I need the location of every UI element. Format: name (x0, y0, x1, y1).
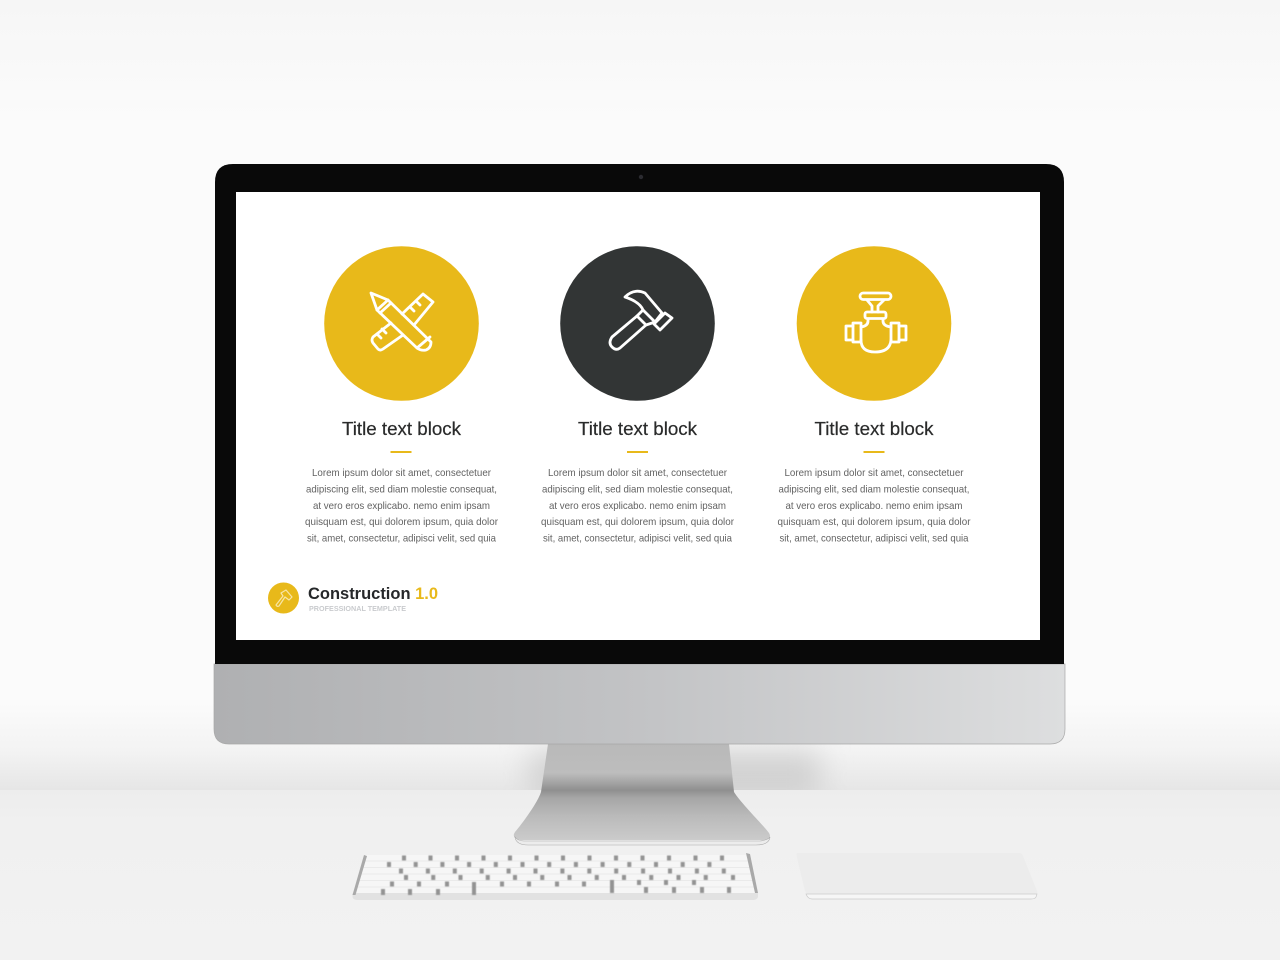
circle badge: dark (560, 246, 715, 401)
body text (305, 468, 499, 544)
monitor chin (214, 664, 1065, 744)
title: Title text block (342, 419, 462, 439)
keyboard body (353, 855, 758, 899)
webcam (639, 175, 643, 179)
footer logo (268, 582, 438, 614)
tagline: PROFESSIONAL TEMPLATE (309, 606, 406, 613)
stand shadow on wall (530, 752, 820, 802)
body text: at vero eros explicabo. nemo enim ipsam (549, 501, 726, 512)
body text: sit, amet, consectetur, adipisci velit, sed quia (307, 534, 496, 544)
icon: hammer (610, 291, 672, 349)
keyboard side rails (352, 855, 367, 895)
slide content (268, 246, 1037, 900)
trackpad (796, 853, 1037, 899)
body text: Lorem ipsum dolor sit amet, consectetuer (784, 468, 964, 479)
body text: at vero eros explicabo. nemo enim ipsam (313, 501, 490, 512)
desk surface (0, 790, 1280, 960)
keyboard (352, 853, 758, 900)
column 1 (305, 246, 499, 544)
body text (778, 468, 971, 544)
column 2 (541, 246, 735, 544)
title: Title text block (814, 419, 935, 439)
divider (627, 451, 648, 453)
circle badge: yellow (324, 246, 479, 401)
monitor bezel (215, 164, 1064, 664)
icon: pipe valve (846, 293, 906, 352)
body text: Lorem ipsum dolor sit amet, consectetuer (548, 468, 728, 479)
body text: quisquam est, qui dolorem ipsum, quia dolor (541, 517, 735, 528)
icon: pencil and ruler (371, 293, 433, 350)
body text (541, 468, 735, 544)
divider (390, 451, 412, 453)
keyboard row lines (355, 861, 756, 887)
body text: adipiscing elit, sed diam molestie consequat, (306, 484, 497, 496)
circle badge: yellow (797, 246, 951, 401)
body text: adipiscing elit, sed diam molestie consequat, (778, 484, 970, 496)
monitor (214, 164, 1065, 845)
body text: quisquam est, qui dolorem ipsum, quia dolor (778, 517, 971, 528)
column 3 (778, 246, 971, 544)
screen (236, 192, 1040, 640)
keyboard keys (381, 858, 736, 895)
body text: sit, amet, consectetur, adipisci velit, sed quia (543, 534, 732, 544)
body text: sit, amet, consectetur, adipisci velit, sed quia (780, 534, 969, 544)
body text: quisquam est, qui dolorem ipsum, quia dolor (305, 517, 499, 528)
monitor stand (514, 744, 770, 845)
body text: Lorem ipsum dolor sit amet, consectetuer (312, 468, 492, 479)
logo badge (268, 582, 299, 614)
brand name: Construction 1.0 (308, 585, 438, 603)
body text: adipiscing elit, sed diam molestie consequat, (542, 484, 733, 496)
icon: small hammer (276, 590, 292, 606)
body text: at vero eros explicabo. nemo enim ipsam (786, 501, 962, 512)
title: Title text block (578, 419, 698, 439)
divider (864, 451, 884, 453)
